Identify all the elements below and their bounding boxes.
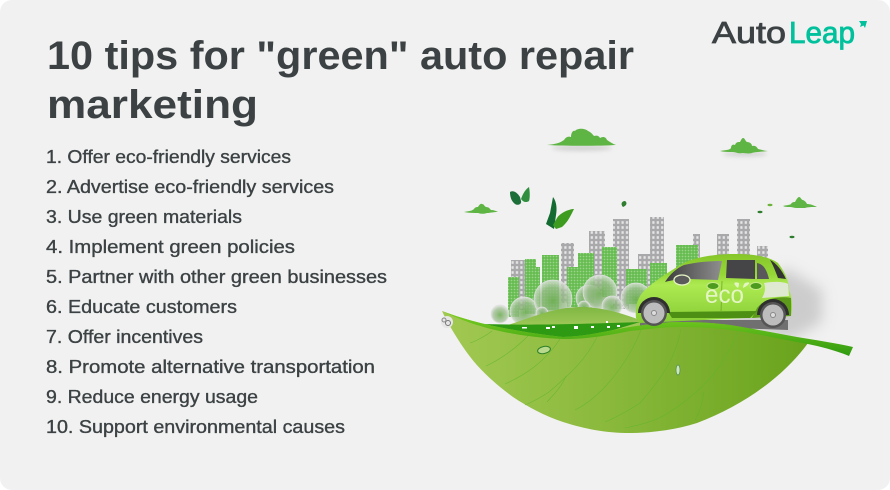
car shadow [720,268,822,340]
numbered list of tips: 2. Advertise eco-friendly services [46,177,334,197]
numbered list of tips: 4. Implement green policies [46,237,295,257]
hill and grass [505,307,650,332]
numbered list of tips: 3. Use green materials [46,207,242,227]
numbered list of tips [46,147,387,437]
butterflies and flying leaves [510,187,794,238]
numbered list of tips: 7. Offer incentives [46,327,203,347]
bubbles [491,275,651,325]
logo: AutoLeap [712,15,867,50]
car door details [721,281,722,312]
green car [636,254,792,328]
illustration: eco car on leaf [441,129,853,433]
numbered list of tips: 10. Support environmental causes [46,417,345,437]
clouds [464,129,817,214]
title: marketing [47,83,258,127]
numbered list of tips: 8. Promote alternative transportation [46,357,375,377]
logo: AutoLeap: Auto [712,15,786,50]
leaf veins [470,329,738,428]
leaf rim and stem [442,311,853,356]
title: 10 tips for "green" auto repair [47,34,634,78]
rear wheel [757,299,789,328]
grey city skyline [511,217,768,310]
car body [636,254,792,323]
numbered list of tips: 1. Offer eco-friendly services [46,147,291,167]
leaf [442,311,808,433]
front wheel [638,297,670,326]
green city skyline [508,245,698,317]
numbered list of tips: 5. Partner with other green businesses [46,267,387,287]
logo: AutoLeap: Leap [789,15,855,50]
title [47,34,634,127]
car windows [665,261,722,282]
water drops [441,316,680,375]
numbered list of tips: 9. Reduce energy usage [46,387,258,407]
eco lettering: eco [705,281,744,309]
numbered list of tips: 6. Educate customers [46,297,237,317]
